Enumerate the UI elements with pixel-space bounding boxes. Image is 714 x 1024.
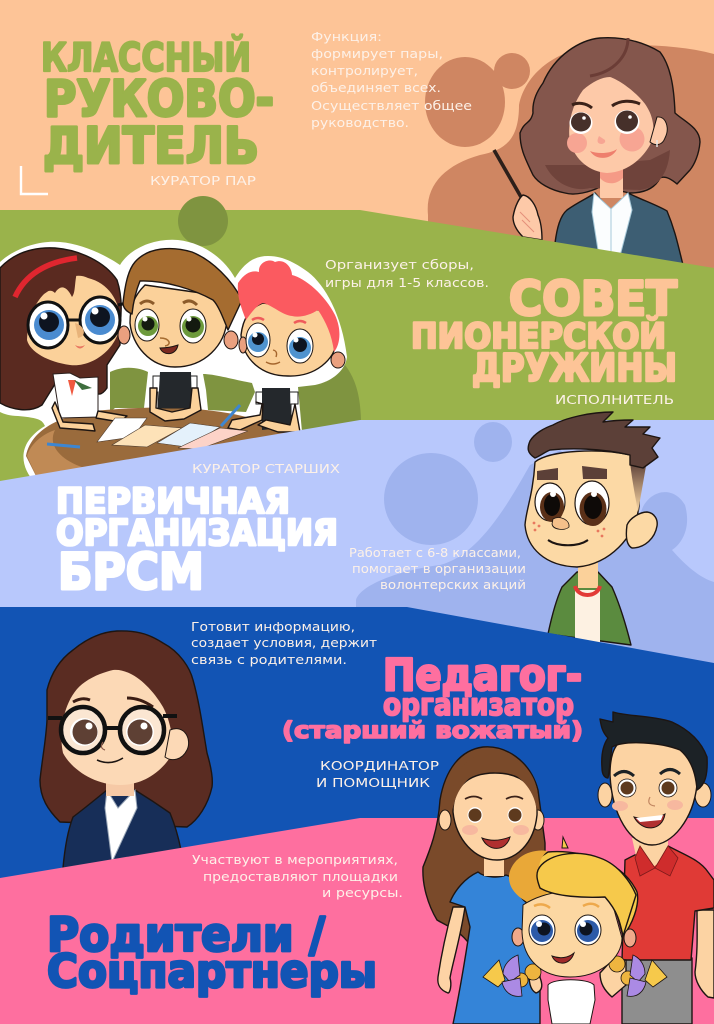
girl with glasses [0, 248, 127, 431]
bows and braid ends [483, 955, 667, 996]
panel: parents and social partners [0, 712, 714, 1024]
illustration: boy in green shirt [525, 412, 660, 645]
panel: pioneer council [0, 196, 714, 490]
background blobs [356, 422, 714, 680]
title: pedagogue-organiser: (старший вожатый) [282, 718, 583, 744]
title: primary BRSM organisation: БРСМ [58, 543, 204, 601]
text: organizes gatherings: игры для 1-5 классов. [325, 275, 489, 290]
illustration: teacher with pointer [494, 38, 700, 265]
background silhouette [425, 45, 714, 300]
title: pedagogue-organiser [282, 650, 583, 744]
text: function [311, 29, 472, 130]
text: prepares information: создает условия, держит [191, 635, 377, 650]
corner mark [21, 166, 48, 194]
text: organizes gatherings [325, 257, 489, 290]
text: function: объединяет всех. [311, 80, 441, 95]
papers on table [97, 418, 248, 449]
text: function: Функция: [311, 29, 382, 44]
text: prepares information: связь с родителями. [191, 652, 347, 667]
text: organizes gatherings: Организует сборы, [325, 257, 474, 272]
panel: pedagogue-organiser [0, 607, 714, 900]
title: class teacher: КЛАССНЫЙ [41, 34, 251, 81]
text: participate in events: Участвуют в мероприятиях, [192, 852, 398, 867]
label: senior curator: КУРАТОР СТАРШИХ [192, 461, 340, 476]
title: pedagogue-organiser: организатор [383, 688, 574, 723]
title: primary BRSM organisation: ОРГАНИЗАЦИЯ [56, 513, 338, 554]
title: pioneer council: СОВЕТ [509, 272, 677, 327]
title: pedagogue-organiser: Педагог- [383, 650, 582, 701]
text: function: контролирует, [311, 63, 418, 78]
title: primary BRSM organisation: ПЕРВИЧНАЯ [56, 482, 290, 522]
text: works with grades 6-8: волонтерских акций [380, 577, 526, 592]
text: participate in events: и ресурсы. [322, 885, 403, 900]
label: pair curator: КУРАТОР ПАР [150, 173, 256, 188]
text: participate in events [192, 852, 403, 900]
title: pioneer council: ДРУЖИНЫ [472, 346, 677, 390]
illustration: teacher with glasses [40, 631, 212, 885]
mother [423, 747, 545, 1024]
title: class teacher: ДИТЕЛЬ [43, 117, 259, 175]
title: parents and partners [47, 908, 377, 998]
background blobs [0, 196, 361, 445]
table [26, 408, 292, 484]
text: works with grades 6-8: Работает с 6-8 классами, [349, 545, 521, 560]
title: parents and partners: Соцпартнеры [47, 945, 377, 998]
white sticker outline [0, 240, 347, 484]
label: executor: ИСПОЛНИТЕЛЬ [555, 392, 674, 407]
father [598, 712, 714, 1024]
panel: BRSM primary organisation [0, 412, 714, 680]
daughter [483, 837, 667, 1024]
panel: class teacher [0, 0, 714, 300]
label: coordinator and helper [316, 758, 439, 790]
text: function: Осуществляет общее [311, 98, 472, 113]
title: primary BRSM organisation [56, 482, 338, 601]
title: class teacher: РУКОВО- [44, 70, 274, 128]
text: participate in events: предоставляют площадки [203, 869, 398, 884]
red-haired boy [228, 260, 345, 432]
title: pioneer council: ПИОНЕРСКОЙ [411, 315, 666, 357]
text: works with grades 6-8 [349, 545, 526, 592]
title: pioneer council [411, 272, 677, 390]
text: prepares information: Готовит информацию, [191, 619, 355, 634]
brown-haired boy [118, 249, 242, 421]
illustration: family [423, 712, 714, 1024]
text: function: формирует пары, [311, 46, 443, 61]
label: coordinator and helper: КООРДИНАТОР [320, 758, 439, 773]
text: works with grades 6-8: помогает в организации [352, 561, 526, 576]
title: class teacher [41, 34, 274, 175]
pencils on table [47, 405, 240, 447]
illustration: three pupils at table [0, 240, 347, 484]
label: coordinator and helper: И ПОМОЩНИК [316, 775, 430, 790]
text: prepares information [191, 619, 377, 667]
title: parents and partners: Родители / [47, 908, 326, 963]
gaps between the pupils [110, 368, 255, 412]
text: function: руководство. [311, 115, 409, 130]
